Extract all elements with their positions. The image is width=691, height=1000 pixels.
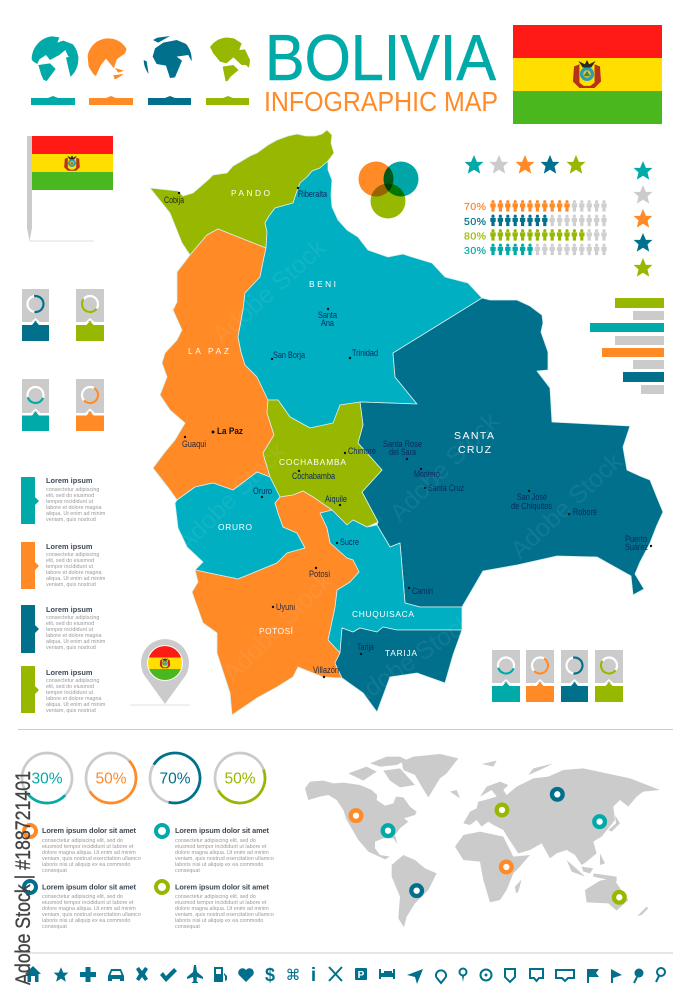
icon: plane bbox=[187, 965, 203, 983]
gauge: 50% green: 50% bbox=[224, 770, 256, 788]
icon row bbox=[25, 965, 665, 986]
small cards left bbox=[22, 289, 104, 431]
icon: small pin bbox=[460, 968, 466, 982]
venn diagram bbox=[358, 162, 418, 218]
list item: green: consectetur adipiscing bbox=[46, 678, 99, 684]
text block: dark blue: dolore magna aliqua. Ut enim ad minim bbox=[42, 906, 136, 912]
city labels: Potosi bbox=[309, 569, 330, 579]
region labels: CHUQUISACA bbox=[352, 609, 414, 619]
icon: magnifier bbox=[656, 968, 665, 982]
region: Santa Cruz bbox=[358, 298, 663, 607]
region: Pando bbox=[150, 130, 334, 255]
watermarks: Adobe Stock bbox=[384, 407, 505, 527]
icon: star bbox=[54, 967, 68, 982]
text block: dark blue: consequat bbox=[42, 924, 67, 930]
city labels: de Chiquitos bbox=[511, 501, 553, 511]
gauge: 70% bbox=[140, 743, 210, 813]
list item: teal: consectetur adipiscing bbox=[46, 487, 99, 493]
list item: orange: tempor incididunt ut bbox=[46, 564, 94, 570]
card: orange bbox=[526, 650, 554, 702]
row: 70% bbox=[464, 200, 607, 213]
icon: flag bbox=[587, 969, 599, 983]
list item: orange: aliqua. Ut enim ad minim bbox=[46, 576, 106, 582]
small cards bottom right bbox=[492, 650, 623, 702]
globe: dark blue bbox=[143, 36, 193, 78]
icon: fuel pump bbox=[214, 967, 227, 982]
card: green bbox=[76, 289, 104, 341]
world map bbox=[305, 754, 660, 927]
row: 50% bbox=[464, 215, 607, 228]
card: dark blue bbox=[22, 289, 49, 341]
list item: orange: elit, sed do eiusmod bbox=[46, 558, 94, 564]
list item: dark blue: tempor incididunt ut bbox=[46, 627, 94, 633]
city labels: San Borja bbox=[273, 350, 305, 360]
list item: teal: elit, sed do eiusmod bbox=[46, 493, 94, 499]
list item: green: elit, sed do eiusmod bbox=[46, 684, 94, 690]
map of Bolivia bbox=[150, 130, 663, 715]
card: teal bbox=[492, 650, 520, 702]
region labels: POTOSÍ bbox=[259, 626, 294, 636]
text block: green: laboris nisi ut aliquip ex ea commodo bbox=[175, 918, 263, 924]
text block: dark blue bbox=[24, 881, 141, 930]
row: 70%: 70% bbox=[464, 201, 486, 213]
icon: car bbox=[108, 969, 124, 981]
watermarks: Adobe Stock bbox=[345, 607, 478, 712]
row: 80% bbox=[464, 229, 607, 242]
donut gauges bbox=[12, 743, 272, 813]
region labels: SANTA bbox=[454, 430, 494, 442]
region: Potosí bbox=[192, 491, 359, 715]
card: orange bbox=[76, 379, 104, 431]
icon: plus bbox=[80, 967, 96, 982]
text block: teal: eiusmod tempor incididunt ut labore et bbox=[175, 844, 267, 850]
people pictogram chart bbox=[464, 200, 607, 257]
icon: speech bubble bbox=[530, 969, 543, 981]
city labels: Puerto bbox=[625, 534, 647, 544]
text block: green: Lorem ipsum dolor sit amet bbox=[175, 882, 270, 892]
list item: dark blue: labore et dolore magna bbox=[46, 633, 101, 639]
city labels: Montero bbox=[414, 469, 440, 479]
text block: dark blue: laboris nisi ut aliquip ex ea commodo bbox=[42, 918, 130, 924]
region: Cochabamba bbox=[263, 400, 382, 527]
list item: teal: labore et dolore magna bbox=[46, 505, 101, 511]
pole flag bbox=[27, 136, 113, 242]
text block: orange: eiusmod tempor incididunt ut labore et bbox=[42, 844, 134, 850]
icon: command: ⌘ bbox=[286, 966, 300, 984]
region labels: BENI bbox=[309, 279, 336, 289]
watermarks: Adobe Stock bbox=[217, 567, 338, 687]
icon: square pin bbox=[505, 969, 515, 982]
list item: green: aliqua. Ut enim ad minim bbox=[46, 702, 106, 708]
region: Beni bbox=[238, 161, 490, 428]
text block: orange bbox=[24, 825, 141, 874]
gauge: 70%: 70% bbox=[159, 770, 191, 788]
text block: green: consectetur adipiscing elit, sed do bbox=[175, 894, 256, 900]
text block: orange: laboris nisi ut aliquip ex ea commodo bbox=[42, 862, 130, 868]
city labels: La Paz bbox=[217, 426, 244, 436]
row: 50%: 50% bbox=[464, 216, 486, 228]
icon: round pin bbox=[634, 968, 644, 983]
list item: dark blue: consectetur adipiscing bbox=[46, 615, 99, 621]
text block: green: veniam, quis nostrud exercitation ullamco bbox=[175, 912, 274, 918]
city labels: Santa Rose bbox=[383, 439, 422, 449]
list item: orange: labore et dolore magna bbox=[46, 570, 101, 576]
city labels: del Sara bbox=[389, 447, 416, 457]
star column bbox=[634, 161, 652, 277]
watermarks: Adobe Stock bbox=[171, 437, 292, 557]
city labels: Guaqui bbox=[182, 439, 206, 449]
globes bbox=[31, 36, 250, 83]
city labels: Villazón bbox=[313, 665, 339, 675]
city labels: Ana bbox=[321, 318, 334, 328]
list item: dark blue: aliqua. Ut enim ad minim bbox=[46, 639, 106, 645]
list item: green: veniam, quis nostrud bbox=[46, 708, 96, 714]
list item: dark blue: elit, sed do eiusmod bbox=[46, 621, 94, 627]
icon: check bbox=[160, 968, 177, 982]
list item: orange: veniam, quis nostrud bbox=[46, 582, 96, 588]
globe: green bbox=[210, 38, 250, 82]
icon: map pin bbox=[436, 970, 446, 983]
city labels: Aiquile bbox=[325, 494, 347, 504]
watermarks: Adobe Stock bbox=[207, 233, 332, 349]
text block: teal: consequat bbox=[175, 868, 200, 874]
text block: teal: consectetur adipiscing elit, sed do bbox=[175, 838, 256, 844]
icon: dollar: $ bbox=[265, 965, 275, 985]
icon: cutlery bbox=[329, 967, 342, 981]
text block: teal: laboris nisi ut aliquip ex ea commodo bbox=[175, 862, 263, 868]
text block: teal: veniam, quis nostrud exercitation ullamco bbox=[175, 856, 274, 862]
icon: heart bbox=[238, 968, 254, 982]
list item: dark blue: Lorem ipsum bbox=[46, 605, 93, 614]
gauge: 50% bbox=[76, 743, 146, 813]
text block: orange: dolore magna aliqua. Ut enim ad minim bbox=[42, 850, 136, 856]
text block: orange: veniam, quis nostrud exercitation ullamco bbox=[42, 856, 141, 862]
list item: orange: consectetur adipiscing bbox=[46, 552, 99, 558]
gauge: 30%: 30% bbox=[31, 770, 63, 788]
gauge: 50% green bbox=[208, 746, 272, 810]
city labels: Sucre bbox=[340, 537, 359, 547]
icon: wide speech bubble bbox=[556, 970, 574, 981]
text block: orange: Lorem ipsum dolor sit amet bbox=[42, 826, 137, 835]
text block: teal: Lorem ipsum dolor sit amet bbox=[175, 826, 270, 835]
list item: dark blue: veniam, quis nostrud bbox=[46, 645, 96, 651]
list item: green bbox=[21, 666, 106, 714]
text block: teal bbox=[156, 825, 274, 874]
region: Chuquisaca bbox=[320, 510, 462, 653]
icon: bed bbox=[379, 969, 395, 979]
icon: cross bbox=[136, 967, 148, 981]
list item: orange bbox=[21, 542, 106, 589]
city labels: Camiri bbox=[412, 586, 433, 596]
region labels: ORURO bbox=[218, 522, 252, 532]
horizontal bar chart bbox=[590, 298, 664, 394]
region: Oruro bbox=[175, 472, 305, 579]
region labels: TARIJA bbox=[385, 648, 417, 658]
text blocks with bullets bbox=[24, 825, 274, 930]
city labels: Chimore bbox=[348, 446, 376, 456]
city labels: Cobija bbox=[164, 195, 184, 205]
text block: dark blue: veniam, quis nostrud exercitation ullamco bbox=[42, 912, 141, 918]
list item: green: labore et dolore magna bbox=[46, 696, 101, 702]
card: dark blue bbox=[561, 650, 588, 702]
list item: dark blue bbox=[21, 605, 106, 653]
city labels: Oruro bbox=[253, 486, 272, 496]
icon: parking: P bbox=[358, 970, 365, 981]
text block: green bbox=[156, 881, 274, 930]
watermarks bbox=[171, 233, 628, 712]
list item: green: tempor incididunt ut bbox=[46, 690, 94, 696]
city labels: Tarija bbox=[357, 642, 374, 652]
list item: teal: veniam, quis nostrud bbox=[46, 517, 96, 523]
color tabs under globes bbox=[31, 96, 249, 105]
list item: teal: aliqua. Ut enim ad minim bbox=[46, 511, 106, 517]
title: INFOGRAPHIC MAP bbox=[264, 86, 498, 117]
globe: orange bbox=[88, 38, 126, 80]
city labels: Cochabamba bbox=[292, 471, 335, 481]
text block: dark blue: eiusmod tempor incididunt ut labore et bbox=[42, 900, 134, 906]
region labels: COCHABAMBA bbox=[279, 457, 346, 467]
row: 80%: 80% bbox=[464, 230, 486, 242]
region labels bbox=[188, 188, 494, 658]
icon: navigation arrow bbox=[407, 969, 423, 984]
region: Tarija bbox=[335, 627, 462, 712]
region labels: LA PAZ bbox=[188, 346, 229, 356]
icon: info: i bbox=[311, 965, 316, 986]
region labels: PANDO bbox=[231, 188, 270, 198]
globe: teal bbox=[31, 36, 80, 83]
list item: teal bbox=[21, 476, 106, 524]
location pin with flag bbox=[130, 639, 190, 706]
city labels: Suárez bbox=[625, 542, 648, 552]
icon: target bbox=[480, 970, 492, 980]
city labels: Roboré bbox=[573, 507, 597, 517]
card: green bbox=[595, 650, 623, 702]
side text list bbox=[21, 476, 106, 714]
city labels: Santa Cruz bbox=[428, 483, 464, 493]
text block: orange: consequat bbox=[42, 868, 67, 874]
list item: teal: Lorem ipsum bbox=[46, 476, 93, 485]
icon: parking bbox=[355, 968, 367, 981]
city labels: San José bbox=[517, 492, 547, 502]
map markers bbox=[351, 789, 625, 903]
watermarks: Adobe Stock bbox=[505, 447, 628, 564]
list item: green: Lorem ipsum bbox=[46, 668, 93, 677]
text block: teal: dolore magna aliqua. Ut enim ad minim bbox=[175, 850, 269, 856]
icon: pennant bbox=[611, 969, 622, 983]
text block: orange: consectetur adipiscing elit, sed do bbox=[42, 838, 123, 844]
title: BOLIVIA bbox=[265, 21, 497, 94]
list item: teal: tempor incididunt ut bbox=[46, 499, 94, 505]
region: La Paz bbox=[153, 229, 274, 500]
list item: orange: Lorem ipsum bbox=[46, 542, 93, 551]
text block: green: dolore magna aliqua. Ut enim ad minim bbox=[175, 906, 269, 912]
flag of Bolivia bbox=[513, 25, 662, 124]
card: teal bbox=[22, 379, 49, 431]
icon: home bbox=[25, 966, 41, 982]
city labels bbox=[164, 187, 652, 678]
text block: dark blue: Lorem ipsum dolor sit amet bbox=[42, 882, 137, 892]
text block: dark blue: consectetur adipiscing elit, sed do bbox=[42, 894, 123, 900]
gauge: 50%: 50% bbox=[95, 770, 127, 788]
city labels: Uyuni bbox=[276, 602, 295, 612]
text block: green: consequat bbox=[175, 924, 200, 930]
row: 30% bbox=[464, 244, 607, 257]
region labels: CRUZ bbox=[458, 444, 492, 456]
city labels: Riberalta bbox=[298, 189, 327, 199]
text block: green: eiusmod tempor incididunt ut labore et bbox=[175, 900, 267, 906]
vertical stock label: Adobe Stock | #188721401 bbox=[12, 771, 35, 985]
star row bbox=[464, 155, 586, 174]
gauge: 30% bbox=[12, 743, 82, 813]
city labels: Santa bbox=[318, 310, 337, 320]
row: 30%: 30% bbox=[464, 245, 486, 257]
city labels: Trinidad bbox=[352, 348, 378, 358]
